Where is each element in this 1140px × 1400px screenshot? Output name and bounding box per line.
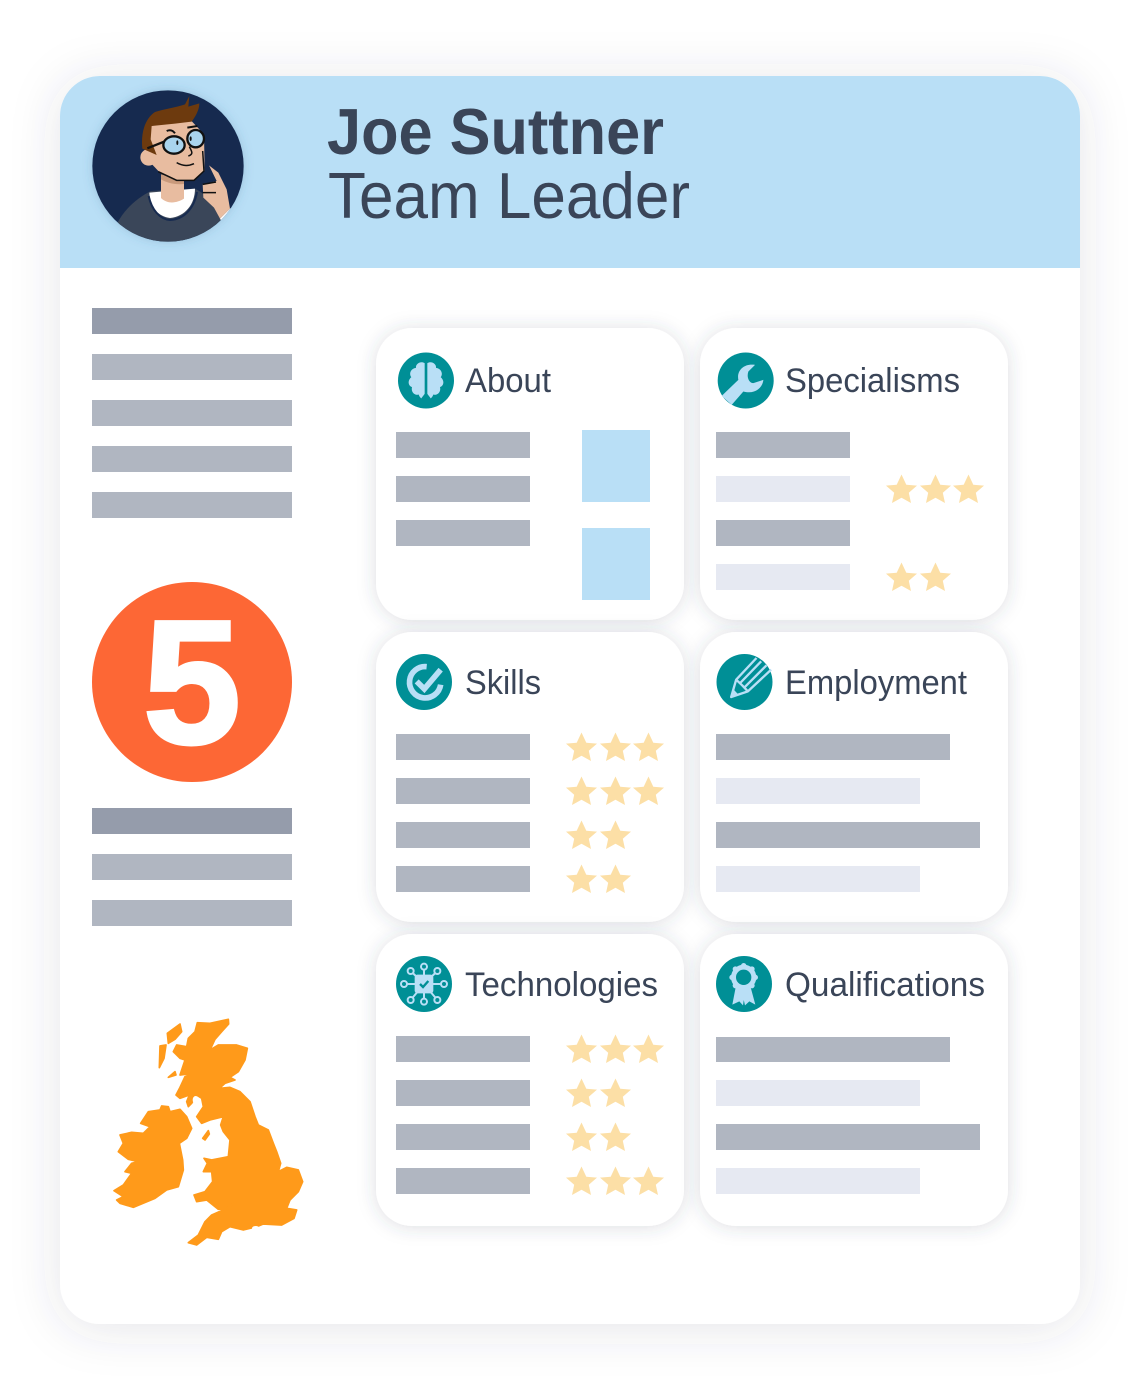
panel: technologies <box>376 934 684 1226</box>
panel: about <box>376 328 684 620</box>
icon: rosette <box>716 956 772 1012</box>
star ratings <box>566 1034 664 1195</box>
icon: circuit chip <box>396 956 452 1012</box>
icon: wrench <box>718 353 774 408</box>
left column: lower placeholder bars <box>92 808 292 926</box>
number badge <box>92 582 292 782</box>
placeholder bars <box>716 734 980 892</box>
heading: employment: Employment <box>785 664 968 702</box>
star ratings <box>566 732 664 893</box>
panel: specialisms <box>700 328 1008 620</box>
star ratings <box>886 474 984 591</box>
heading: about: About <box>465 362 552 400</box>
heading: skills: Skills <box>465 664 541 702</box>
main card <box>60 76 1080 1324</box>
heading: qualifications: Qualifications <box>785 966 985 1004</box>
title: name: Joe Suttner <box>327 95 664 168</box>
placeholder bars <box>716 432 850 590</box>
icon: brain <box>398 353 454 408</box>
left column: text placeholder bars <box>92 308 292 518</box>
number badge: 5 <box>143 585 241 781</box>
panel: skills <box>376 632 684 922</box>
text placeholder bars <box>396 432 530 546</box>
heading: specialisms: Specialisms <box>785 362 960 400</box>
image placeholders <box>582 430 650 600</box>
icon: pencil <box>717 654 772 710</box>
subtitle: role: Team Leader <box>328 159 690 232</box>
header band <box>60 76 1080 268</box>
icon: check ring <box>396 654 452 710</box>
placeholder bars <box>396 1036 530 1194</box>
panel: employment <box>700 632 1008 922</box>
map: UK and Ireland <box>114 1019 303 1245</box>
placeholder bars <box>716 1037 980 1194</box>
avatar: cartoon portrait <box>92 90 244 249</box>
panel: qualifications <box>700 934 1008 1226</box>
placeholder bars <box>396 734 530 892</box>
heading: technologies: Technologies <box>465 966 658 1004</box>
